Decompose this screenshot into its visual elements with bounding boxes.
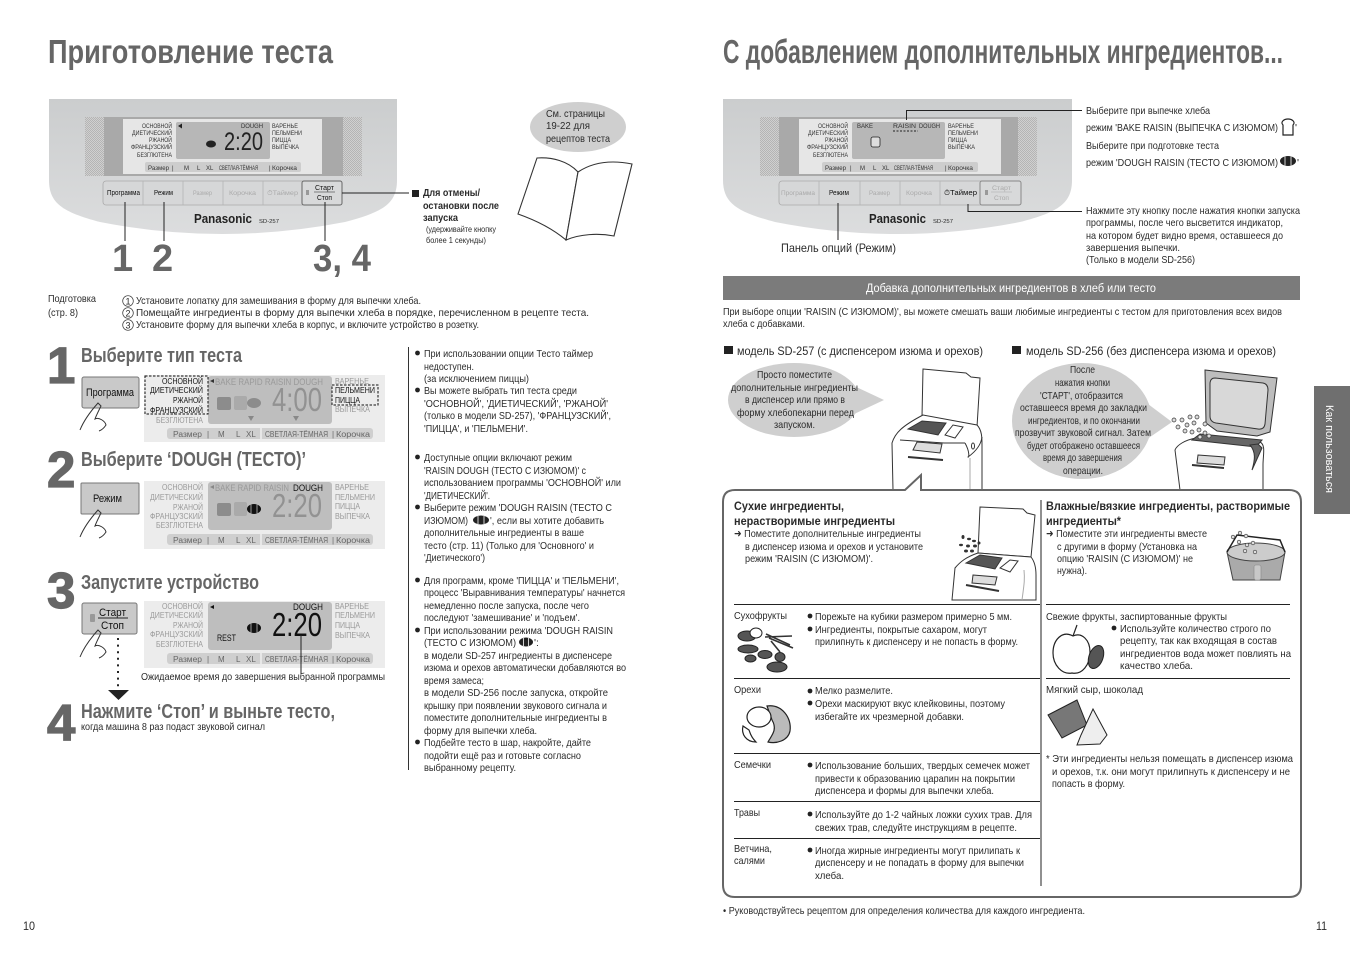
footnote in box: попасть в форму. (1052, 778, 1125, 790)
panel: control panel left: РЖАНОЙ (149, 136, 172, 144)
step 3: ФРАНЦУЗСКИЙ (150, 628, 203, 639)
footnote in box: * Эти ингредиенты нельзя помещать в диспенсер изюма (1046, 753, 1293, 765)
panel: control panel left: СВЕТЛАЯ-ТЁМНАЯ (219, 165, 258, 172)
step 3: XL (246, 655, 256, 664)
text block: notes: ': (534, 637, 539, 649)
step 2: L (236, 536, 241, 545)
heading: dry ingredients: в диспенсер изюма и орехов и установите (745, 541, 923, 553)
step 1: 4:00 (272, 381, 322, 418)
step 2 (47, 441, 385, 549)
step 1: ВЫПЕЧКА (335, 404, 370, 414)
heading: moist ingredients: с другими в форму (Установка на (1057, 541, 1197, 553)
text block: notes: При использовании режима 'DOUGH RAISIN (424, 625, 613, 637)
note: cancel stop: Для отмены/ (423, 188, 480, 199)
text block: notes: подойти ещё раз и готовьте согласно (424, 750, 581, 762)
panel: control panel right: СВЕТЛАЯ-ТЁМНАЯ (894, 165, 933, 172)
text block: notes: 'RAISIN DOUGH (ТЕСТО С ИЗЮМОМ)' с (424, 465, 586, 477)
step 1: M (218, 430, 225, 439)
step 3: БЕЗГЛЮТЕНА (156, 639, 203, 649)
panel: control panel left: БЕЗГЛЮТЕНА (137, 153, 172, 159)
step 1: ВАРЕНЬЕ (335, 376, 369, 386)
row: herbs: свежих трав, следуйте инструкциям в рецепте. (815, 822, 1017, 834)
step 2: ВЫПЕЧКА (335, 511, 370, 521)
panel: control panel right: Корочка (906, 190, 932, 197)
heading: dry ingredients: режим 'RAISIN (С ИЗЮМОМ)'. (745, 553, 873, 565)
legend: SD-256: модель SD-256 (без диспенсера изюма и орехов) (1026, 344, 1276, 358)
step 1: 1 (47, 337, 75, 394)
callout bubble: SD-256: 'СТАРТ', отобразится (1040, 390, 1123, 402)
text block: raisin modes: ' (1297, 157, 1299, 169)
step 2: M (218, 536, 225, 545)
step 4 (47, 694, 335, 751)
step 3: Старт (99, 607, 126, 619)
step 3: СВЕТЛАЯ-ТЁМНАЯ (265, 655, 328, 664)
heading: moist ingredients: Влажные/вязкие ингредиенты, растворимые (1046, 499, 1290, 513)
panel: control panel right: ДИЕТИЧЕСКИЙ (808, 129, 848, 137)
heading: dry ingredients: ➜ Поместите дополнительные ингредиенты (734, 528, 921, 540)
row: fresh fruit: качество хлеба. (1120, 660, 1193, 672)
row: ham (734, 843, 1024, 882)
callout bubble: SD-256: ингредиентов, и по окончании (1028, 415, 1140, 427)
panel: control panel right: Размер (825, 166, 847, 172)
panel: control panel right: Старт (992, 185, 1011, 192)
footnote in box: и орехов, т.к. они могут прилипнуть к диспенсеру и не (1052, 766, 1290, 778)
step 1: | (207, 430, 209, 439)
panel: control panel left: ФРАНЦУЗСКИЙ (131, 143, 172, 151)
row: nuts: избегайте их чрезмерной добавки. (815, 711, 964, 723)
step 3: | (332, 655, 334, 664)
row: dried fruit: прилипнуть к диспенсеру и не попасть в форму. (815, 636, 1018, 648)
panel: control panel left: Корочка (272, 166, 298, 172)
panel: control panel left: ДИЕТИЧЕСКИЙ (132, 129, 172, 137)
icon: bread machine SD-257 (892, 369, 982, 490)
row: fresh fruit: Свежие фрукты, заспиртованные фрукты (1046, 611, 1227, 623)
text block: notes: дополнительные ингредиенты в ваше (424, 527, 584, 539)
panel: control panel right: Стоп (994, 195, 1009, 202)
row: ham: салями (734, 855, 765, 867)
heading: dry ingredients (734, 499, 923, 565)
icon: bread pan (1227, 531, 1285, 580)
step 2: ДИЕТИЧЕСКИЙ (150, 491, 203, 502)
panel: control panel left: ⏱Таймер (267, 189, 298, 197)
text block: notes: 'ОСНОВНОЙ', 'ДИЕТИЧЕСКИЙ', 'РЖАНОЙ' (424, 397, 608, 410)
row: cheese chocolate (1046, 684, 1143, 745)
step 2: ФРАНЦУЗСКИЙ (150, 510, 203, 521)
step 1: Выберите тип теста (81, 345, 243, 367)
heading: moist ingredients: ➜ Поместите эти ингредиенты вместе (1046, 528, 1207, 540)
panel: control panel left: | (172, 166, 174, 172)
step numbers under panel: 3, 4 (313, 238, 371, 280)
step 3: Размер (173, 655, 203, 664)
panel: control panel right: Программа (781, 190, 815, 197)
text block: intro: хлеба с добавками. (723, 318, 805, 330)
text block: raisin modes: ' (1295, 122, 1297, 134)
text block: notes: в модели SD-257 ингредиенты в диспенсере (424, 650, 612, 662)
title: left page: Приготовление теста (48, 33, 334, 70)
callout lines: right panel (838, 110, 1082, 240)
step 2: ПИЦЦА (335, 501, 360, 511)
text block: notes: Вы можете выбрать тип теста среди (424, 385, 577, 397)
panel: control panel right: XL (882, 166, 890, 172)
arrow: step 3 to step 4 (108, 638, 129, 700)
panel: control panel left (49, 99, 397, 234)
text block: preparation: (стр. 8) (48, 307, 78, 319)
step 2: СВЕТЛАЯ-ТЁМНАЯ (265, 536, 328, 545)
panel: control panel right: ОСНОВНОЙ (818, 122, 848, 130)
step numbers under panel: 1 (112, 238, 133, 280)
step 1: СВЕТЛАЯ-ТЁМНАЯ (265, 430, 328, 439)
banner: adding ingredients (723, 276, 1300, 300)
text block: preparation (48, 293, 589, 331)
panel: ingredients box (723, 475, 1301, 897)
text block: notes (415, 348, 626, 774)
text block: timer note (1086, 205, 1300, 266)
step 2: ОСНОВНОЙ (162, 481, 203, 492)
panel: control panel left: Panasonic (194, 211, 252, 226)
row: cheese chocolate: Мягкий сыр, шоколад (1046, 684, 1143, 696)
note: cancel stop: запуска (423, 213, 458, 224)
text block: notes: процесс 'Выравнивания температуры' начнется (424, 587, 625, 599)
panel: control panel right: ФРАНЦУЗСКИЙ (807, 143, 848, 151)
panel: control panel left: ВАРЕНЬЕ (272, 124, 298, 130)
text block: raisin modes: режим 'DOUGH RAISIN (ТЕСТО С ИЗЮМОМ) (1086, 157, 1278, 169)
panel: control panel left: XL (206, 166, 214, 172)
callout bubble: SD-257: форму хлебопекарни перед (737, 407, 854, 419)
step 3: Корочка (336, 655, 371, 664)
step 1: ПИЦЦА (335, 395, 360, 405)
heading: dry ingredients: Сухие ингредиенты, (734, 499, 844, 513)
callout bubble: SD-257: в диспенсер или прямо в (745, 394, 845, 406)
panel: control panel right: SD-257 (933, 219, 953, 225)
text block: notes: ИЗЮМОМ) (424, 515, 468, 527)
text block: raisin modes: Выберите при выпечке хлеба (1086, 105, 1210, 117)
step 1: ОСНОВНОЙ (162, 375, 203, 386)
step 4: 4 (47, 694, 76, 751)
row: herbs (734, 807, 1032, 834)
step 4: Нажмите ‘Стоп’ и выньте тесто, (81, 701, 335, 723)
row: ham: Иногда жирные ингредиенты могут прилипать к (815, 845, 1020, 857)
row: dried fruit: Ингредиенты, покрытые сахаром, могут (815, 624, 987, 636)
callout bubble: SD-257: Просто поместите (757, 369, 832, 381)
text block: preparation: 3 (126, 320, 131, 330)
row: ham: диспенсеру и не попадать в форму для выпечки (815, 857, 1024, 869)
panel: control panel left: DOUGH (241, 124, 263, 130)
step 3: ВАРЕНЬЕ (335, 601, 369, 611)
panel: control panel right: ВЫПЕЧКА (948, 145, 975, 151)
text block: notes: 'Диетического') (424, 552, 485, 564)
text block: notes: ', если вы хотите добавить (490, 515, 604, 527)
footer note: • Руководствуйтесь рецептом для определения количества для каждого ингредиента. (723, 905, 1085, 917)
step 2: BAKE RAPID RAISIN (215, 483, 289, 493)
step 1: ФРАНЦУЗСКИЙ (150, 404, 203, 415)
panel: control panel left: ПИЦЦА (272, 138, 291, 144)
step 2: Корочка (336, 536, 371, 545)
callout bubble: SD-256: После (1070, 364, 1095, 376)
callout bubble: recipe pages: 19-22 для (546, 120, 590, 132)
panel: control panel right: Panasonic (869, 211, 926, 226)
table rules (734, 604, 1290, 838)
panel: control panel left: L (197, 166, 201, 172)
step 1: L (236, 430, 241, 439)
panel: control panel right: DOUGH (919, 124, 940, 130)
step 3 (47, 562, 385, 683)
panel: control panel left: Старт (315, 185, 335, 192)
step 3: | (207, 655, 209, 664)
step 3: ОСНОВНОЙ (162, 600, 203, 611)
step 3: DOUGH (293, 602, 323, 612)
note: cancel stop (412, 188, 499, 245)
step 2: | (332, 536, 334, 545)
row: dried fruit (734, 610, 1018, 672)
panel: control panel left: ПЕЛЬМЕНИ (272, 131, 302, 137)
text block: preparation: Подготовка (48, 293, 96, 305)
row: herbs: Используйте до 1-2 чайных ложки сухих трав. Для (815, 809, 1032, 821)
panel: control panel right: RAISIN (893, 124, 916, 130)
text block: notes: (только в модели SD-257), 'ФРАНЦУЗСКИЙ', (424, 409, 611, 422)
heading: dry ingredients: нерастворимые ингредиенты (734, 514, 895, 528)
text block: notes: недоступен. (424, 361, 474, 373)
legend: SD-257: модель SD-257 (с диспенсером изюма и орехов) (737, 344, 983, 358)
text block: notes: форму для выпечки хлеба. (424, 725, 537, 737)
row: seeds: Использование больших, твердых семечек может (815, 760, 1030, 772)
callout bubble: recipe pages (530, 102, 626, 152)
text block: notes: (ТЕСТО С ИЗЮМОМ) (424, 637, 516, 649)
heading: moist ingredients: ингредиенты* (1046, 514, 1121, 528)
footnote in box (1046, 753, 1293, 790)
step 1: Программа (86, 387, 135, 399)
callout bubble: SD-257 (728, 363, 884, 437)
text block: timer note: программы, после чего высветится индикатор, (1086, 217, 1283, 229)
text block: notes: в модели SD-256 после запуска, откройте (424, 687, 608, 699)
row: dried fruit: Порежьте на кубики размером примерно 5 мм. (815, 611, 1012, 623)
panel: control panel left: Размер (148, 166, 170, 172)
text block: notes: 'ДИЕТИЧЕСКИЙ'. (424, 489, 490, 502)
step 2: Выберите ‘DOUGH (ТЕСТО)’ (81, 449, 306, 471)
row: nuts: Орехи маскируют вкус клейковины, поэтому (815, 698, 1006, 710)
heading: moist ingredients (1046, 499, 1290, 577)
step numbers under panel: 2 (152, 238, 173, 280)
text block: notes: (за исключением пиццы) (424, 373, 529, 385)
step 3: РЖАНОЙ (173, 619, 203, 630)
text block: notes: последуют 'замешивание' и 'подъем'. (424, 612, 580, 624)
step 2: | (207, 536, 209, 545)
text block: timer note: завершения выпечки. (1086, 242, 1180, 254)
step 1: БЕЗГЛЮТЕНА (156, 415, 203, 425)
callout bubble: SD-256: оставшееся время до закладки (1020, 402, 1147, 414)
text block: notes: использованием программы 'ОСНОВНОЙ' или (424, 476, 621, 489)
text block: notes: Подбейте тесто в шар, накройте, дайте (424, 737, 591, 749)
step 3: ПИЦЦА (335, 620, 360, 630)
row: seeds: диспенсера и формы для выпечки хлеба. (815, 785, 994, 797)
note: cancel stop: остановки после (423, 201, 499, 212)
text block: raisin modes: Выберите при подготовке теста (1086, 140, 1219, 152)
step 1: ДИЕТИЧЕСКИЙ (150, 384, 203, 395)
row: ham: хлеба. (815, 870, 844, 882)
text block: preparation: 1 (126, 296, 131, 306)
text block: intro (723, 306, 1282, 330)
panel: control panel right: Размер (869, 190, 890, 197)
row: nuts: Орехи (734, 684, 761, 696)
row: seeds: Семечки (734, 759, 771, 771)
step 1: Размер (173, 430, 203, 439)
callout bubble: recipe pages: См. страницы (546, 108, 605, 120)
row: fresh fruit (1046, 611, 1291, 673)
text block: notes: 'ПИЦЦА', и 'ПЕЛЬМЕНИ'. (424, 423, 528, 435)
text block: timer note: (Только в модели SD-256) (1086, 254, 1195, 266)
row: dried fruit: Сухофрукты (734, 610, 787, 622)
text block: notes: выбранному рецепту. (424, 762, 516, 774)
text block: preparation: Помещайте ингредиенты в форму для выпечки хлеба в порядке, перечисленном в рецепте теста. (136, 307, 589, 319)
panel: control panel right: Режим (829, 190, 849, 197)
text block: notes: крышку при появлении звукового сигнала и (424, 700, 607, 712)
row: fresh fruit: ингредиентов вода может повлиять на (1120, 648, 1291, 660)
panel: control panel right: ⏱Таймер (944, 189, 977, 197)
panel: control panel left: ОСНОВНОЙ (142, 122, 172, 130)
icon: bread machine SD-256 (1172, 370, 1277, 490)
panel: control panel right: БЕЗГЛЮТЕНА (813, 153, 848, 159)
panel: control panel left: Программа (107, 190, 140, 197)
step 1: XL (246, 430, 256, 439)
step 3: L (236, 655, 241, 664)
divider (1040, 500, 1042, 886)
callout bubble: SD-257: дополнительные ингредиенты (731, 382, 858, 394)
heading: moist ingredients: опцию 'RAISIN (С ИЗЮМОМ)' не (1057, 553, 1193, 565)
panel: control panel right: M (860, 166, 865, 172)
step 2: БЕЗГЛЮТЕНА (156, 520, 203, 530)
panel: control panel left: M (184, 166, 189, 172)
text block: timer note: на котором будет видно время, оставшееся до (1086, 230, 1283, 242)
callout bubble: SD-256 (1012, 363, 1172, 479)
row: seeds: привести к образованию царапин на покрытии (815, 773, 1015, 785)
text block: notes: поместите дополнительные ингредиенты в (424, 712, 607, 724)
text block: timer note: Нажмите эту кнопку после нажатия кнопки запуска (1086, 205, 1300, 217)
page number 10: 10 (23, 919, 35, 933)
panel: control panel left: | (269, 166, 271, 172)
panel: control panel right: РЖАНОЙ (825, 136, 848, 144)
step 3: REST (217, 633, 236, 643)
page number 11: 11 (1316, 919, 1327, 933)
step 3: M (218, 655, 225, 664)
row: seeds (734, 759, 1030, 797)
note: cancel stop: (удерживайте кнопку (426, 224, 497, 234)
step 3: Запустите устройство (81, 572, 259, 594)
panel: control panel right: ПЕЛЬМЕНИ (948, 131, 978, 137)
callout bubble: recipe pages: рецептов теста (546, 133, 610, 145)
step 2: XL (246, 536, 256, 545)
text block: notes: изюма и орехов автоматически добавляются во (424, 662, 626, 674)
row: ham: Ветчина, (734, 843, 772, 855)
step 3: 3 (47, 562, 75, 619)
text block: notes: Выберите режим 'DOUGH RAISIN (ТЕСТО С (424, 502, 612, 514)
step 2: DOUGH (293, 483, 323, 493)
callout bubble: SD-256: прозвучит звуковой сигнал. Затем (1015, 427, 1151, 439)
text block: notes: Для программ, кроме 'ПИЦЦА' и 'ПЕЛЬМЕНИ', (424, 575, 619, 587)
text block: preparation: 2 (126, 308, 131, 318)
panel: control panel left: 2:20 (224, 128, 263, 156)
text block: preparation: Установите лопатку для замешивания в форму для выпечки хлеба. (136, 295, 421, 307)
step 1: | (332, 430, 334, 439)
row: nuts: Мелко размелите. (815, 685, 893, 697)
step 3: Ожидаемое время до завершения выбранной программы (141, 671, 385, 683)
text block: preparation: Установите форму для выпечки хлеба в корпус, и включите устройство в розетку. (136, 319, 479, 331)
side tab: Как пользоваться (1323, 405, 1335, 493)
divider line (408, 347, 410, 770)
step 2: ВАРЕНЬЕ (335, 482, 369, 492)
step numbers under panel (112, 238, 371, 280)
step 2: Режим (93, 493, 122, 505)
step 2: ПЕЛЬМЕНИ (335, 492, 375, 502)
heading: moist ingredients: нужна). (1057, 565, 1087, 577)
note: cancel stop: более 1 секунды) (426, 235, 486, 245)
step 3: ДИЕТИЧЕСКИЙ (150, 609, 203, 620)
panel: control panel left: Размер (193, 190, 212, 197)
text block: raisin modes: режим 'BAKE RAISIN (ВЫПЕЧКА С ИЗЮМОМ) (1086, 122, 1278, 134)
callout bubble: SD-256: нажатия кнопки (1055, 377, 1110, 389)
panel: control panel right: | (945, 166, 947, 172)
step 3: Стоп (101, 620, 124, 632)
text block: notes: время замеса; (424, 675, 484, 687)
step 2: 2:20 (272, 487, 322, 524)
text block: notes: При использовании опции Тесто таймер (424, 348, 593, 360)
callout lines: buttons (125, 193, 409, 241)
panel: control panel left: ВЫПЕЧКА (272, 145, 299, 151)
step 1: ПЕЛЬМЕНИ (335, 385, 375, 395)
step 3: 2:20 (272, 606, 322, 643)
panel: control panel left: SD-257 (259, 219, 279, 225)
caption: options panel: Панель опций (Режим) (781, 241, 896, 255)
panel: control panel left: Режим (154, 190, 173, 197)
step 1 (47, 337, 385, 442)
side tab (1314, 386, 1350, 514)
panel: control panel right: | (850, 166, 852, 172)
panel: control panel right: ВАРЕНЬЕ (948, 124, 974, 130)
row: fresh fruit: рецепту, так как входящая в состав (1120, 635, 1277, 647)
row: fresh fruit: Используйте количество строго по (1120, 623, 1271, 635)
panel: control panel right: L (873, 166, 877, 172)
callout bubble: SD-256: время до завершения (1043, 452, 1122, 464)
panel: control panel left: Корочка (229, 190, 256, 197)
row: nuts (734, 684, 1006, 743)
row: herbs: Травы (734, 807, 760, 819)
step 2: РЖАНОЙ (173, 501, 203, 512)
text block: notes: тесто (стр. 11) (Только для 'Основного' и (424, 540, 594, 552)
text block: notes: Доступные опции включают режим (424, 452, 572, 464)
panel: control panel right: Корочка (948, 166, 974, 172)
step 3: ПЕЛЬМЕНИ (335, 610, 375, 620)
step 1: BAKE RAPID RAISIN DOUGH (215, 377, 323, 387)
panel: control panel right (723, 99, 1072, 234)
callout bubble: SD-257: запуском. (774, 419, 815, 431)
text block: notes: немедленно после запуска, после чего (424, 600, 589, 612)
panel: control panel right: ПИЦЦА (948, 138, 967, 144)
callout bubble: SD-256: операции. (1063, 465, 1103, 477)
panel: control panel right: BAKE (857, 124, 873, 130)
icon: machine with ingredients (952, 507, 1036, 600)
step 1: Корочка (336, 430, 371, 439)
callout bubble: SD-256: будет отображено оставшееся (1027, 440, 1140, 452)
step 3: ВЫПЕЧКА (335, 630, 370, 640)
step 1: РЖАНОЙ (173, 394, 203, 405)
banner: adding ingredients: Добавка дополнительных ингредиентов в хлеб или тесто (866, 281, 1156, 295)
panel: control panel left: Стоп (317, 195, 332, 202)
step 2: 2 (47, 441, 75, 498)
step 4: когда машина 8 раз подаст звуковой сигнал (81, 721, 265, 733)
icon: open book (518, 158, 632, 240)
step 2: Размер (173, 536, 203, 545)
text block: raisin modes (1086, 105, 1299, 169)
